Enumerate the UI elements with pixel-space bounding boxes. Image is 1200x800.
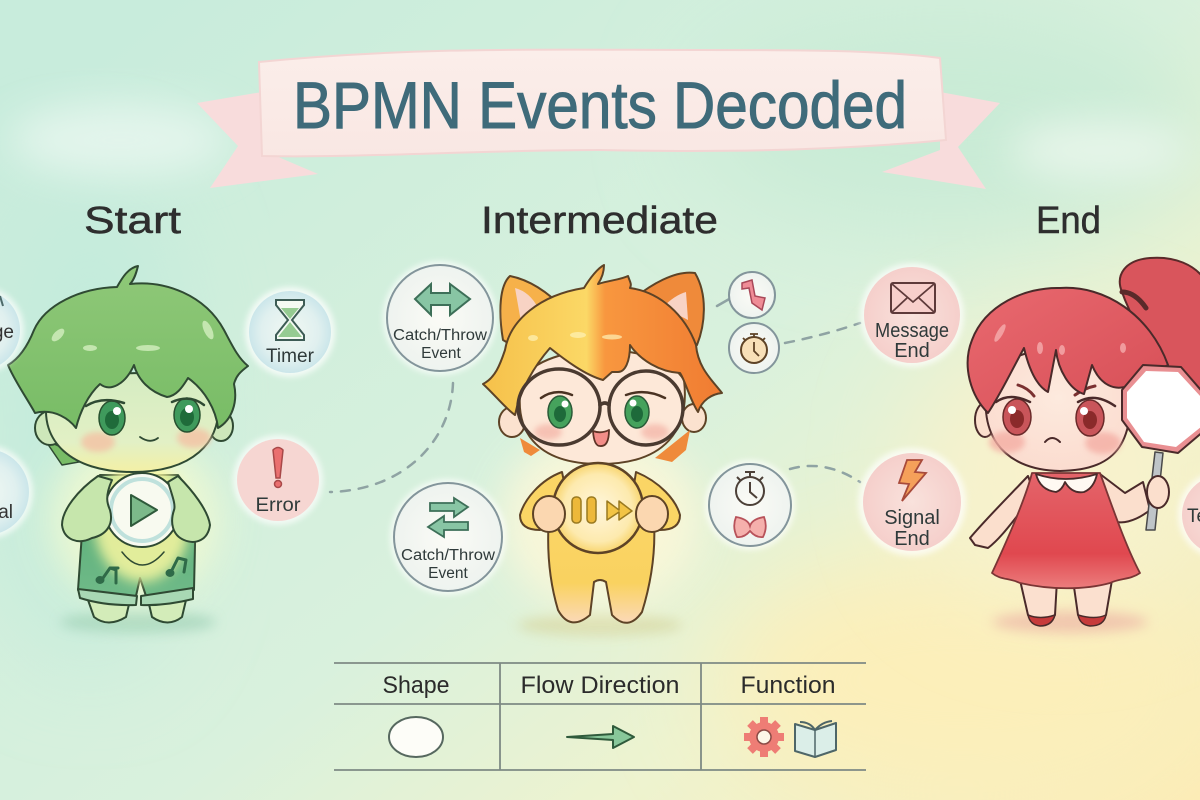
event: timer and bowtie [705,460,795,550]
crescent [122,552,164,565]
icon: bowtie [734,517,766,537]
ribbon tail left [197,92,318,188]
body [548,490,654,623]
hair [8,266,248,428]
glow on chest [94,462,190,582]
event: Catch/Throw top [383,261,497,375]
mouth [140,437,158,441]
ribbon band [259,50,946,156]
hair [483,265,722,415]
title text: BPMN Events Decoded [293,68,907,142]
collar [1036,474,1097,492]
heading: Intermediate: Intermediate [481,200,718,242]
hair [968,288,1168,413]
event: Error: Error [256,495,301,516]
event: small link icon [729,272,775,318]
hair shine [528,332,622,341]
icon: hourglass [276,300,304,340]
event: Signal End: End [894,528,930,550]
shadow [992,611,1148,633]
blush [81,432,115,452]
mouth [593,430,609,446]
stop sign [1122,365,1200,453]
table: legend [334,663,866,770]
ear [975,403,995,437]
event: Message (cropped) [0,286,24,374]
blush [534,424,562,440]
column header: Shape: Shape [382,672,450,699]
heading: Start: Start [84,200,182,242]
icon: double arrow [415,284,470,315]
event: Message End [860,263,964,367]
left arm [970,476,1035,548]
glow [50,435,220,605]
arms [520,472,570,530]
glasses [518,369,683,445]
event: Catch/Throw bottom: Catch/Throw [401,547,496,564]
title banner [197,50,1000,189]
music notes [97,558,186,583]
event: Catch/Throw top: Catch/Throw [393,327,488,344]
event: Error [233,435,323,525]
icon: envelope [891,283,935,313]
brows [1018,385,1034,396]
shadow [60,611,216,633]
glow [500,430,700,610]
panel: end character [968,258,1200,633]
face [520,350,685,464]
eyes [99,401,125,435]
cuffs [78,589,137,605]
icon: opposing arrows [428,498,468,537]
event: Signal (cropped) [0,445,33,539]
shoes [1028,615,1055,626]
disc: start event [105,473,179,547]
ears [35,411,65,445]
panel: start character [8,266,248,633]
panel: intermediate character [483,265,722,636]
icon: exclamation mark [273,448,283,488]
hand [1147,476,1169,508]
shape: ellipse [389,717,443,757]
event: Signal End [858,448,966,556]
event: Catch/Throw bottom [390,479,506,595]
right arm [1100,474,1150,522]
arrow: flow [567,726,634,748]
event: Catch/Throw top: Event [421,345,462,362]
hair shine [50,319,216,351]
event: Timer [245,287,335,377]
shadow [518,614,682,636]
column header: Flow Direction: Flow Direction [520,672,680,699]
icon: stopwatch [736,472,764,505]
event: Catch/Throw bottom: Event [428,565,469,582]
hands [533,496,668,532]
face [46,373,219,472]
neck tuft [45,440,90,465]
icon: gear [744,717,784,757]
icon: lightning bolt [899,460,926,501]
event: Terminate (cropped) [1178,471,1200,559]
event: Message End: Message [875,320,949,342]
connector: dashed lines [330,298,860,492]
hair shine [992,323,1126,355]
eyes [548,396,572,428]
face [986,349,1131,471]
hair tie [1122,292,1146,308]
table rules [334,663,866,770]
heading: End: End [1036,200,1101,242]
eyes [1003,399,1031,435]
stop sign pole [1146,452,1163,530]
blush [989,431,1025,453]
event: small stopwatch [729,323,779,373]
event: Message End: End [894,340,930,362]
dress [992,473,1140,588]
disc: intermediate event [553,463,643,553]
mouth [1045,438,1060,442]
event: Timer: Timer [266,346,315,367]
icon: open book [795,721,836,757]
column header: Function: Function [740,672,836,699]
ponytail [1120,258,1200,400]
arms [62,476,210,542]
legs [1020,580,1057,620]
hair behind [520,430,690,462]
overalls [78,475,196,596]
side ears [499,407,525,437]
ears [500,276,565,350]
ribbon tail right [882,92,1000,189]
event: Signal End: Signal [884,507,940,529]
feet [88,600,130,622]
